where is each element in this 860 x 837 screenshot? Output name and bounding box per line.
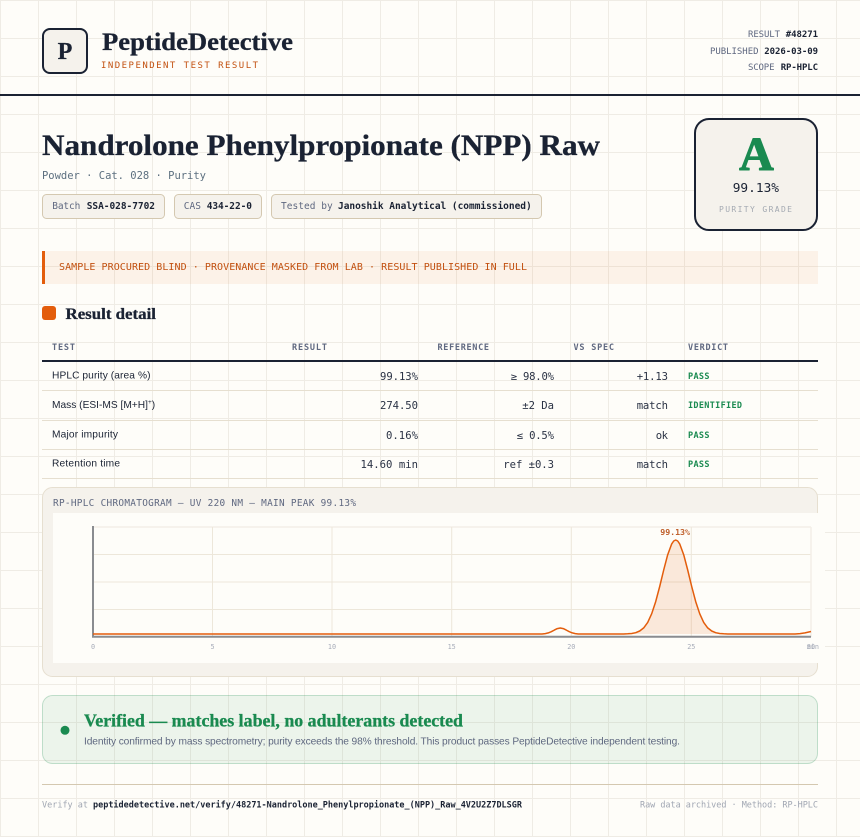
x axis labels: 30 [807, 643, 815, 651]
row: mass [52, 399, 742, 412]
row: major impurity: ≤ 0.5% [517, 430, 555, 442]
x axis labels [91, 643, 819, 651]
x axis labels: 5 [210, 643, 215, 651]
callout text: Identity confirmed by mass spectrometry; purity exceeds the 98% threshold. This product passes PeptideDetective independent testing. [84, 737, 680, 748]
table header [52, 343, 728, 353]
section heading: result detail: Result detail [66, 306, 157, 323]
product title: Nandrolone Phenylpropionate (NPP) Raw [42, 129, 600, 162]
tag: batch: Batch [52, 201, 80, 212]
tag: batch: SSA-028-7702 [87, 201, 155, 212]
row: mass: ±2 Da [522, 400, 554, 412]
verify link: Verify at [42, 801, 88, 811]
row: retention time: 14.60 min [360, 459, 418, 471]
tag: CAS [174, 194, 262, 218]
provenance notice: SAMPLE PROCURED BLIND · PROVENANCE MASKED FROM LAB · RESULT PUBLISHED IN FULL [59, 262, 527, 273]
purity value: 99.13% [733, 181, 779, 196]
brand tagline: INDEPENDENT TEST RESULT [101, 61, 259, 71]
provenance notice [42, 251, 818, 284]
x axis labels: 0 [91, 643, 95, 651]
tag: tested by: Tested by [281, 201, 333, 212]
axes [93, 526, 811, 637]
result metadata: RP-HPLC [781, 63, 818, 73]
x axis labels: 15 [448, 643, 456, 651]
row: mass: IDENTIFIED [688, 401, 742, 411]
row: major impurity: 0.16% [386, 430, 419, 442]
row: major impurity: ok [656, 430, 669, 442]
row: mass: match [637, 400, 668, 412]
peak label: 99.13% [660, 527, 690, 537]
table header: VS SPEC [574, 343, 614, 353]
result metadata: 2026-03-09 [764, 47, 818, 57]
badge caption: PURITY GRADE [719, 205, 792, 214]
product subtitle: Powder · Cat. 028 · Purity [42, 170, 206, 182]
table header: VERDICT [688, 343, 728, 353]
verified callout [42, 696, 818, 764]
row: HPLC purity: HPLC purity (area %) [52, 370, 150, 382]
tag: batch [42, 194, 164, 218]
chromatogram panel [42, 488, 825, 676]
x axis labels: 20 [567, 643, 575, 651]
chromatogram chart [53, 513, 825, 663]
tag: CAS: CAS [184, 201, 201, 212]
row: retention time: Retention time [52, 459, 120, 470]
sample tags [42, 194, 542, 218]
row: retention time: ref ±0.3 [503, 459, 554, 471]
tag: CAS: 434-22-0 [207, 201, 252, 212]
row: retention time: PASS [688, 460, 710, 470]
chart title: RP-HPLC CHROMATOGRAM — UV 220 NM — MAIN PEAK 99.13% [53, 498, 356, 509]
tag: tested by: Janoshik Analytical (commissioned) [338, 201, 532, 212]
row: major impurity [52, 430, 710, 442]
row: mass: Mass (ESI-MS [M+H] [52, 400, 148, 411]
table header: TEST [52, 343, 75, 353]
x axis labels: 25 [687, 643, 695, 651]
table header: RESULT [292, 343, 327, 353]
result metadata: #48271 [786, 30, 818, 40]
row: HPLC purity: PASS [688, 372, 710, 382]
logo mark: P [58, 39, 72, 65]
peak area [624, 540, 728, 634]
result metadata: PUBLISHED [710, 47, 758, 57]
row: HPLC purity: ≥ 98.0% [511, 371, 555, 383]
status dot [60, 726, 70, 735]
verify link: peptidedetective.net/verify/48271-Nandrolone_Phenylpropionate_(NPP)_Raw_4V2U2Z7DLSGR [93, 800, 523, 811]
grade letter: A [739, 128, 774, 181]
results table [42, 343, 818, 479]
tag: tested by [272, 194, 542, 218]
purity grade badge [695, 119, 817, 230]
row: mass: + [148, 399, 152, 406]
row: retention time: match [637, 459, 668, 471]
brand name: PeptideDetective [102, 29, 293, 56]
x axis labels: 10 [328, 643, 336, 651]
result metadata [710, 30, 818, 73]
row: HPLC purity [52, 370, 710, 383]
row: mass: ) [152, 400, 155, 411]
callout heading: Verified — matches label, no adulterants detected [84, 711, 463, 731]
table header: REFERENCE [438, 343, 489, 353]
row: retention time [52, 459, 710, 471]
row: major impurity: PASS [688, 431, 710, 441]
row: mass: 274.50 [380, 400, 418, 412]
archive note: Raw data archived · Method: RP-HPLC [640, 801, 818, 811]
row: HPLC purity: +1.13 [637, 371, 668, 383]
x axis labels: min [807, 643, 819, 651]
row: major impurity: Major impurity [52, 430, 119, 441]
trace line [93, 540, 811, 634]
row: HPLC purity: 99.13% [380, 371, 419, 383]
result metadata: RESULT [748, 30, 781, 40]
logo mark [43, 29, 87, 73]
result metadata: SCOPE [748, 63, 774, 73]
footer [42, 784, 818, 811]
header [43, 29, 818, 73]
